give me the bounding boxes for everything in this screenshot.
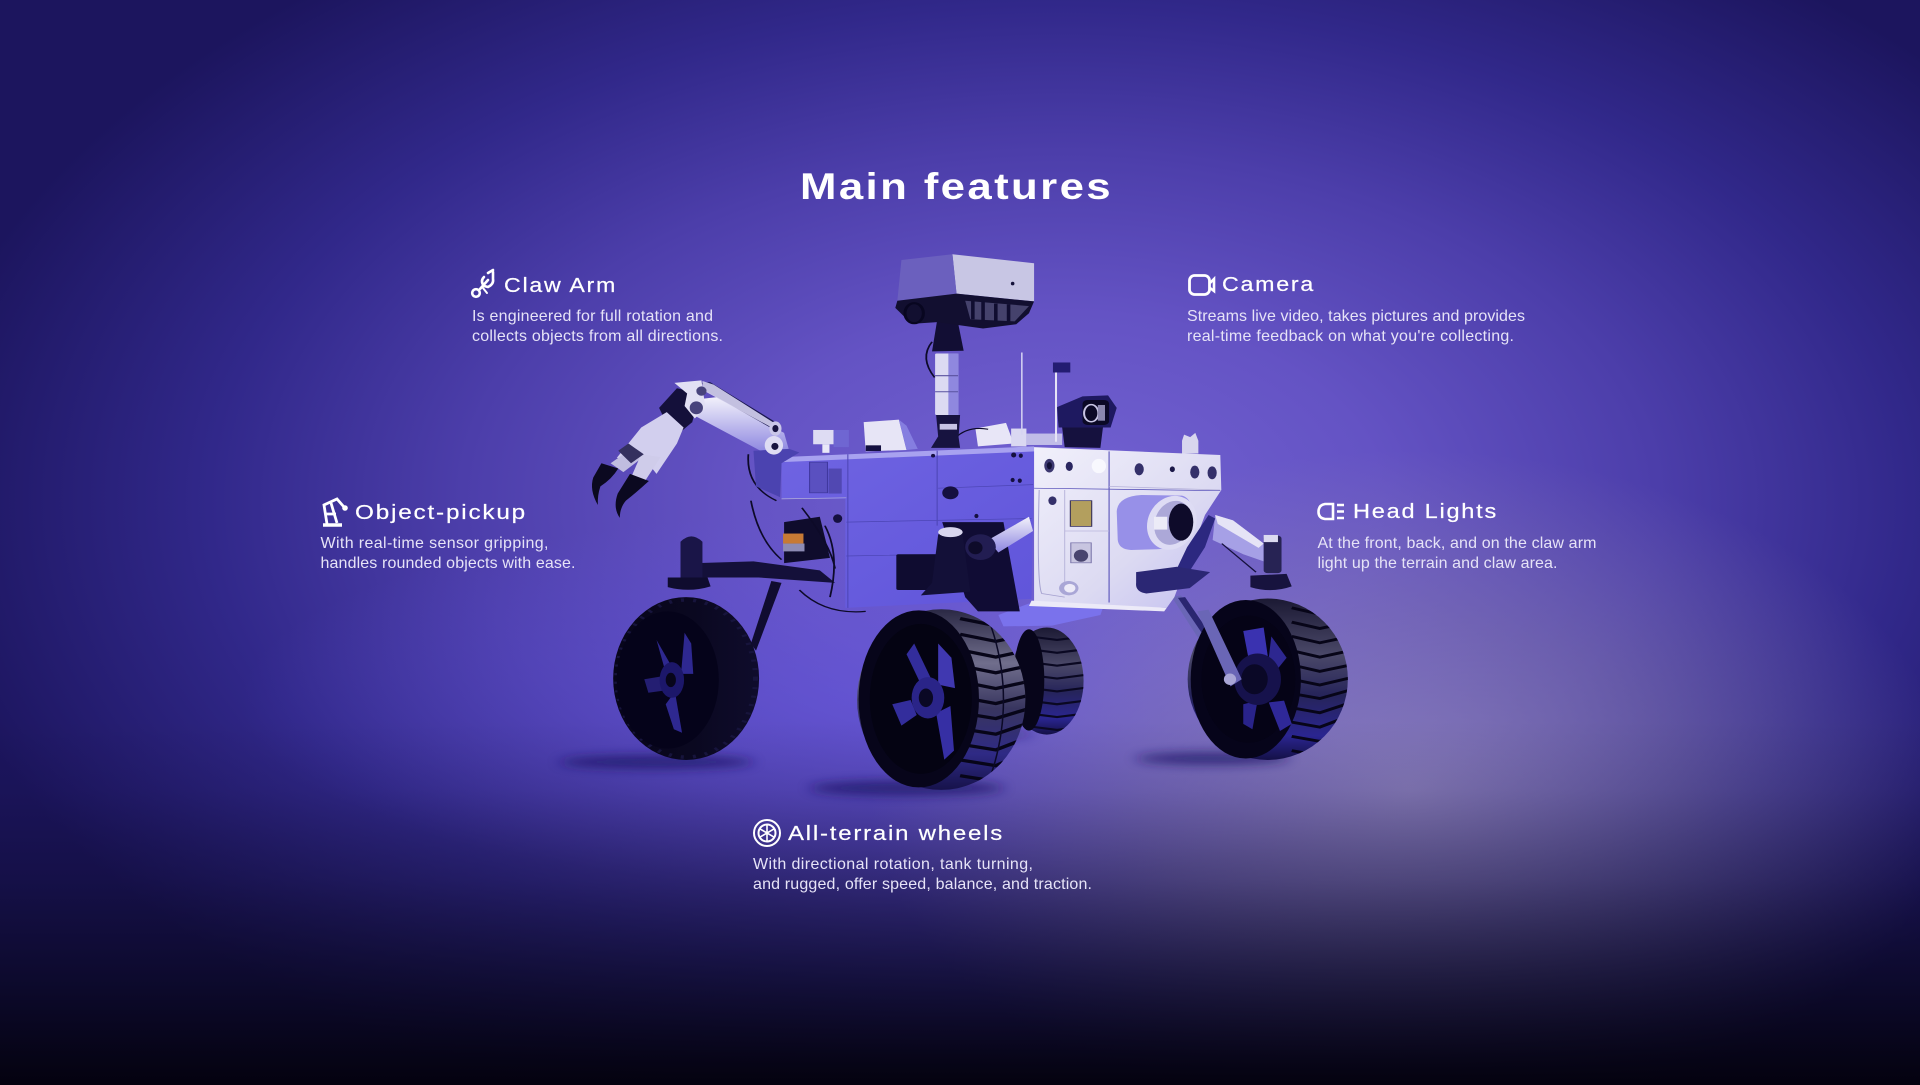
body <box>782 446 1221 626</box>
body dots and panels <box>1038 459 1217 597</box>
top deck equipment <box>813 420 1198 454</box>
feature: head lights <box>1318 501 1596 572</box>
description: object-pickup: handles rounded objects with ease. <box>320 555 576 572</box>
description: head lights: light up the terrain and claw area. <box>1318 555 1558 572</box>
rover illustration <box>560 254 1350 796</box>
heading: camera: Camera <box>1222 274 1315 296</box>
feature: claw arm <box>472 270 723 345</box>
middle suspension <box>748 454 1033 612</box>
description: all-terrain wheels: and rugged, offer speed, balance, and traction. <box>753 876 1092 893</box>
description: camera: real-time feedback on what you're collecting. <box>1187 328 1514 345</box>
icon: wheel <box>754 820 780 846</box>
mast and pan-tilt camera <box>926 320 964 448</box>
feature: object-pickup <box>320 499 576 572</box>
heading: claw arm: Claw Arm <box>504 275 617 297</box>
claw arm <box>592 380 799 518</box>
heading: object-pickup: Object-pickup <box>355 502 527 524</box>
heading: all-terrain wheels: All-terrain wheels <box>788 823 1004 845</box>
left rear suspension <box>668 536 835 651</box>
feature: all-terrain wheels <box>753 820 1092 893</box>
description: claw arm: collects objects from all directions. <box>472 328 723 345</box>
description: head lights: At the front, back, and on the claw arm <box>1318 535 1596 552</box>
front axle and struts <box>1172 595 1241 686</box>
flag <box>1053 362 1070 442</box>
right leg <box>1136 515 1292 594</box>
description: object-pickup: With real-time sensor gripping, <box>320 535 548 552</box>
icon: claw <box>472 270 493 297</box>
rear left wheel <box>613 597 759 760</box>
title: Main features <box>800 166 1113 207</box>
rear inner wheel <box>1010 627 1085 735</box>
description: camera: Streams live video, takes pictures and provides <box>1187 308 1525 325</box>
side camera <box>1057 395 1117 448</box>
main top camera <box>895 254 1034 329</box>
icon: robot arm <box>323 499 346 525</box>
headlight <box>1117 494 1201 552</box>
antenna <box>1020 352 1023 435</box>
front wheel <box>857 609 1029 790</box>
ground shadows <box>560 732 1289 796</box>
heading: head lights: Head Lights <box>1353 501 1498 523</box>
description: all-terrain wheels: With directional rotation, tank turning, <box>753 856 1033 873</box>
description: claw arm: Is engineered for full rotation and <box>472 308 713 325</box>
icon: video camera <box>1190 276 1214 294</box>
feature: camera <box>1187 274 1525 345</box>
icon: headlight <box>1318 504 1344 519</box>
right wheel <box>1188 599 1350 760</box>
